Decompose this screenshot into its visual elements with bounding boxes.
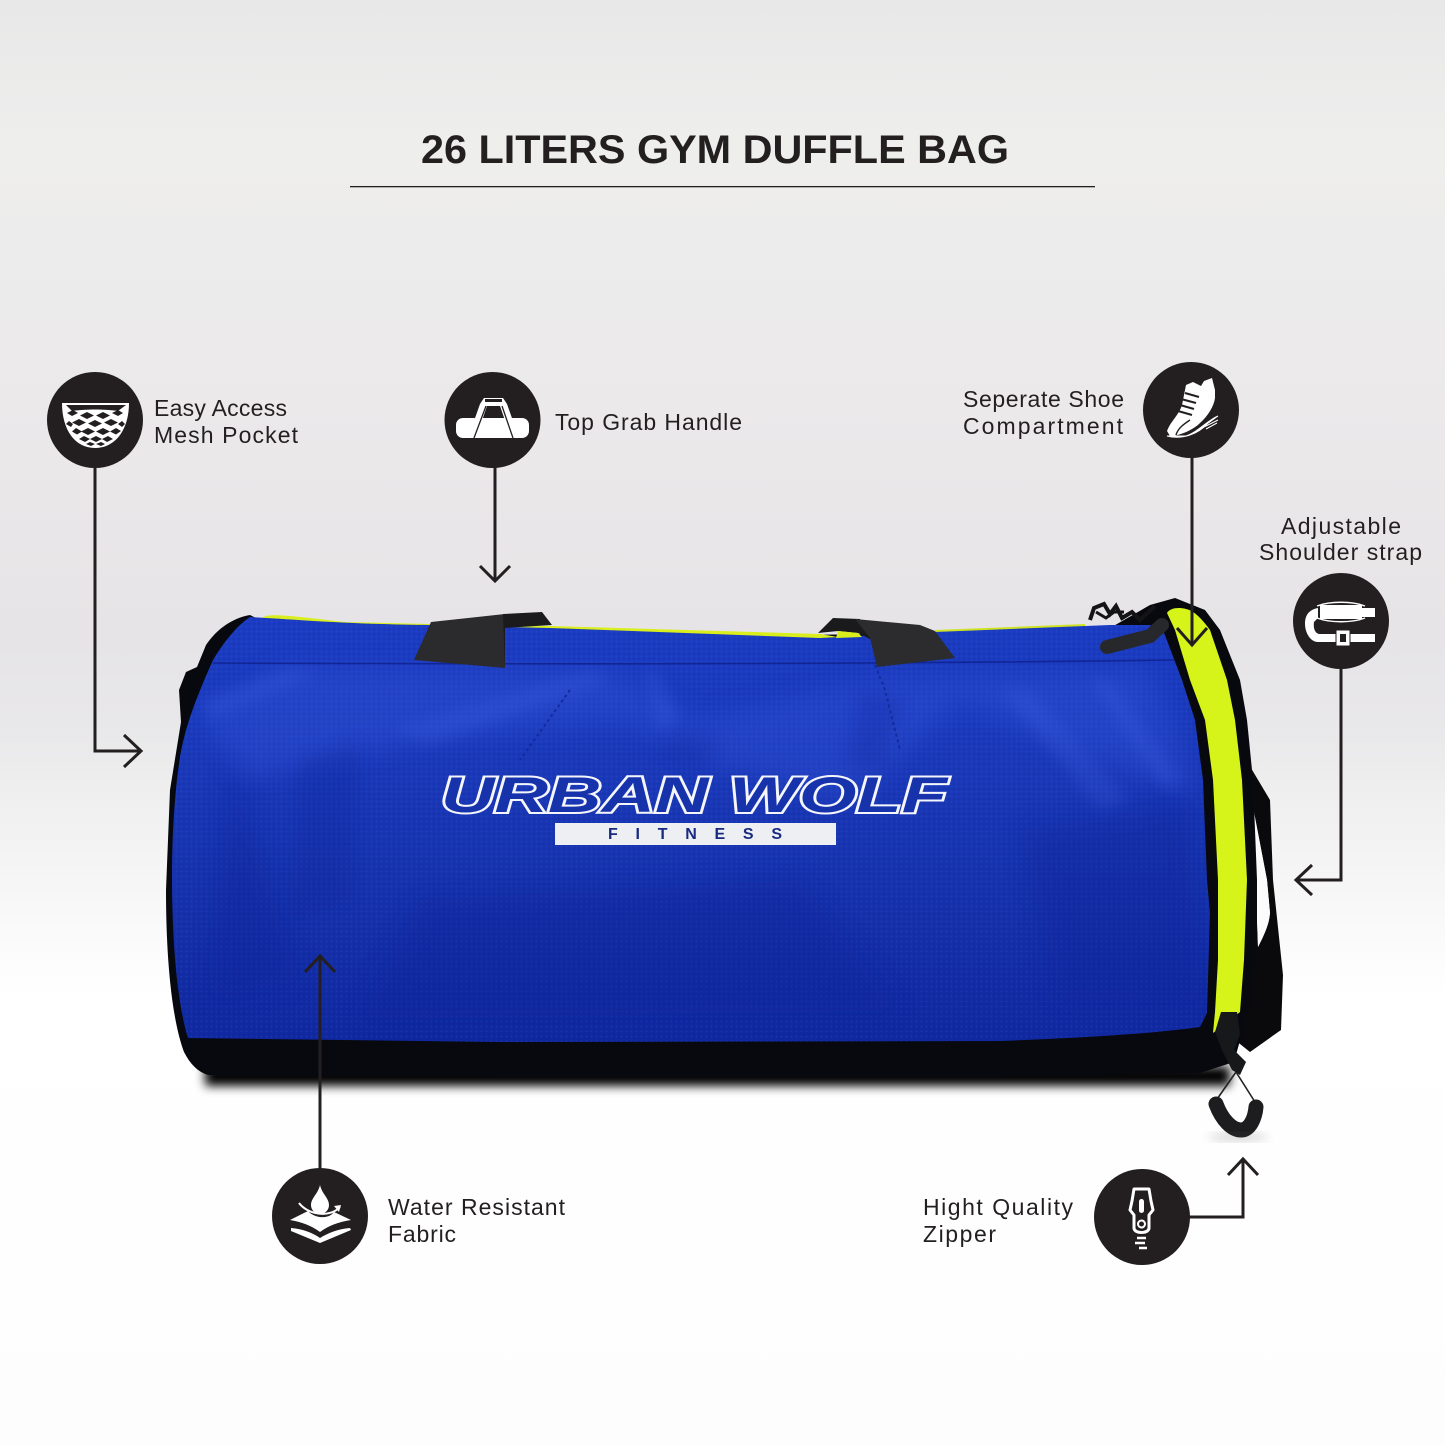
label: shoe compartment [963,386,1124,439]
neon zipper strip [1167,608,1247,1033]
label: top grab handle: Top Grab Handle [555,409,742,435]
seam [213,660,1175,664]
arrow: shoulder strap [1296,660,1341,895]
icon: mesh pocket [47,372,143,468]
arrow: mesh pocket [95,460,141,767]
neon top edge [262,615,838,640]
label: zipper [923,1194,1074,1247]
top zipper pull [1090,604,1162,647]
label: shoulder strap [1259,513,1422,565]
label: zipper: Hight Quality [923,1194,1074,1220]
arrow: zipper [1185,1159,1258,1217]
icon: belt strap [1293,573,1389,669]
handle left [414,612,552,668]
icon: zipper [1094,1169,1190,1265]
logo on bag: FITNESS [608,826,782,843]
label: shoulder strap: Shoulder strap [1259,539,1422,565]
label: shoulder strap: Adjustable [1281,513,1401,539]
bag black shell [166,598,1257,1077]
label: shoe compartment: Compartment [963,413,1124,439]
blue body [172,617,1210,1042]
arrow: shoe compartment [1177,450,1207,645]
logo on bag [441,767,949,845]
logo on bag: URBAN WOLF [441,767,949,823]
title: 26 LITERS GYM DUFFLE BAG [421,128,1009,172]
label: zipper: Zipper [923,1221,996,1247]
zipper slider and pull [1208,1012,1268,1139]
label: mesh pocket: Easy Access [154,395,287,421]
bag ground shadow [205,1066,1230,1086]
product photo: duffle bag [160,598,1283,1139]
shoulder strap [1235,758,1283,1052]
arrow: water resistant [305,956,335,1175]
label: water resistant: Water Resistant [388,1194,566,1220]
icon: water resistant [272,1168,368,1264]
label: water resistant [388,1194,566,1247]
arrow: top handle [480,460,510,581]
icon: shoe [1143,362,1239,458]
handle right [818,618,955,667]
label: mesh pocket: Mesh Pocket [154,422,299,448]
label: water resistant: Fabric [388,1221,456,1247]
label: shoe compartment: Seperate Shoe [963,386,1124,412]
icon: duffle bag handle [444,372,540,468]
label: mesh pocket [154,395,299,448]
